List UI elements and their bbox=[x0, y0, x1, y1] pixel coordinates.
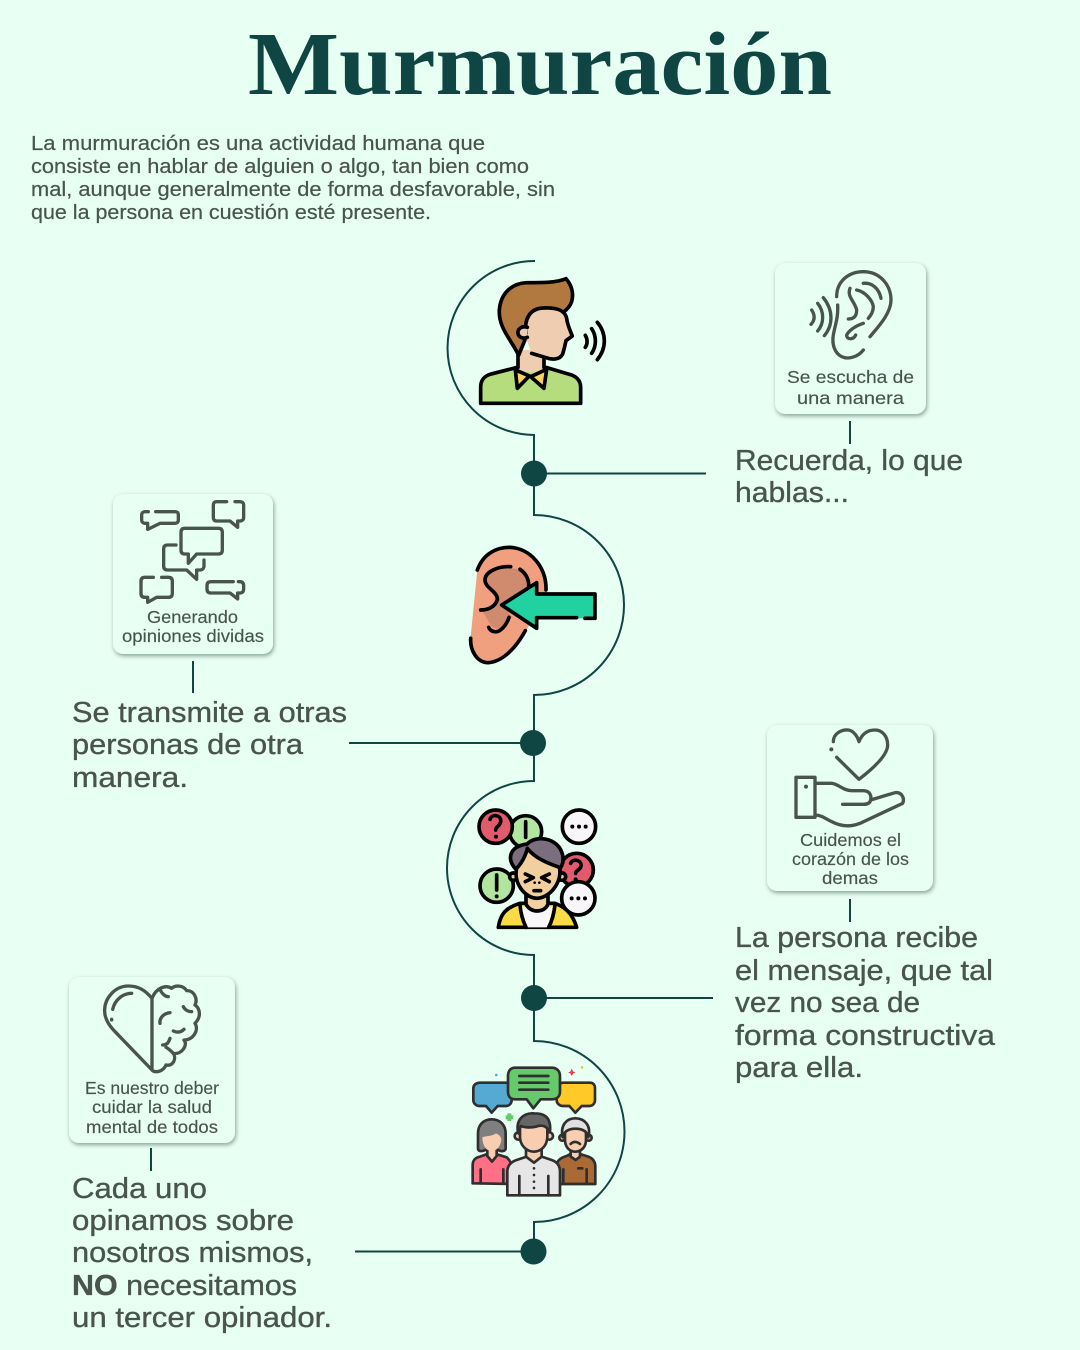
intro text: que la persona en cuestión esté presente. bbox=[31, 202, 431, 224]
text: step 2 bbox=[72, 697, 347, 794]
icon: group of people talking bbox=[473, 1066, 595, 1195]
text: step 3: para ella. bbox=[735, 1052, 863, 1084]
text: step 3: La persona recibe bbox=[735, 922, 978, 954]
intro text: mal, aunque generalmente de forma desfavorable, sin bbox=[31, 179, 555, 201]
panel: card opinions bbox=[113, 494, 273, 654]
icon: man speaking bbox=[481, 279, 604, 403]
title: Murmuración bbox=[248, 15, 832, 114]
panel: card heart and brain: cuidar la salud bbox=[92, 1097, 212, 1117]
panel: card listening: una manera bbox=[797, 388, 904, 408]
text: step 3: el mensaje, que tal bbox=[735, 955, 993, 987]
icon: hand with heart bbox=[796, 730, 903, 826]
timeline connector bbox=[151, 261, 850, 1251]
icon: heart brain bbox=[105, 986, 199, 1072]
panel: card heart and brain bbox=[69, 977, 235, 1143]
panel: card heart: corazón de los bbox=[792, 849, 909, 869]
icon: ear with arrow bbox=[471, 547, 595, 663]
icon: confused person bbox=[479, 810, 596, 927]
panel: card listening bbox=[775, 263, 926, 414]
text: step 1: hablas... bbox=[735, 477, 849, 509]
intro text bbox=[31, 133, 555, 224]
text: step 1 bbox=[735, 445, 963, 509]
text: step 2: personas de otra bbox=[72, 729, 304, 761]
panel: card heart bbox=[767, 725, 933, 891]
text: step 2: Se transmite a otras bbox=[72, 697, 347, 729]
panel: card heart: demas bbox=[822, 868, 878, 888]
panel: card opinions: opiniones dividas bbox=[122, 626, 264, 646]
timeline dots bbox=[520, 460, 547, 1264]
panel: card listening: Se escucha de bbox=[787, 367, 914, 387]
text: step 4: opinamos sobre bbox=[72, 1205, 294, 1237]
text: step 3: forma constructiva bbox=[735, 1020, 996, 1052]
intro text: La murmuración es una actividad humana que bbox=[31, 133, 485, 155]
text: step 4: nosotros mismos, bbox=[72, 1237, 313, 1269]
panel: card heart and brain: Es nuestro deber bbox=[85, 1078, 219, 1098]
text: step 4: un tercer opinador. bbox=[72, 1302, 332, 1334]
text: step 1: Recuerda, lo que bbox=[735, 445, 963, 477]
panel: card heart and brain: mental de todos bbox=[86, 1117, 218, 1137]
text: step 2: manera. bbox=[72, 762, 188, 794]
text: step 3 bbox=[735, 922, 996, 1084]
panel: card heart: Cuidemos el bbox=[800, 830, 901, 850]
intro text: consiste en hablar de alguien o algo, tan bien como bbox=[31, 156, 529, 178]
text: step 4 bbox=[72, 1173, 332, 1334]
icon: ear with sound bbox=[811, 272, 891, 358]
icon: speech bubbles bbox=[141, 502, 244, 602]
text: step 4: NO necesitamos bbox=[72, 1270, 297, 1302]
text: step 4: Cada uno bbox=[72, 1173, 207, 1205]
panel: card opinions: Generando bbox=[147, 607, 238, 627]
text: step 3: vez no sea de bbox=[735, 987, 920, 1019]
